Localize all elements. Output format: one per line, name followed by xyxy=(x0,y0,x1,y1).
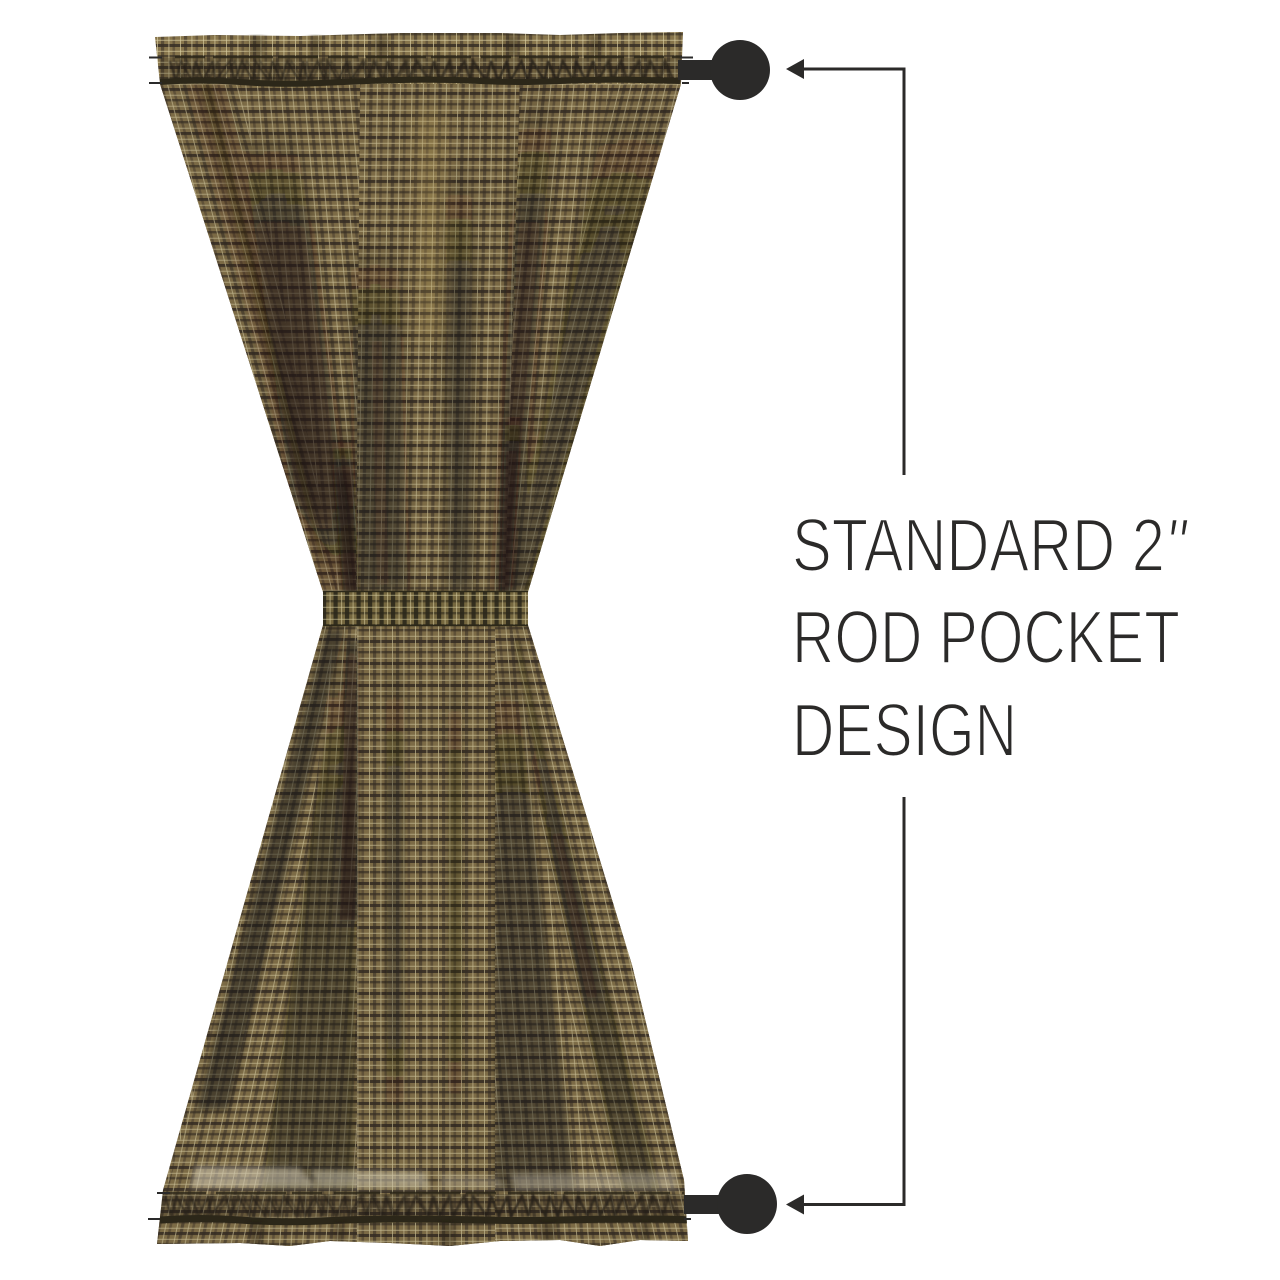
bottom ruffle folds xyxy=(250,1222,650,1246)
arrow: top bracket pointing to rod xyxy=(786,59,904,475)
upper curtain section xyxy=(150,25,690,595)
top ruffle folds xyxy=(250,36,602,56)
curtain panel xyxy=(150,25,730,1250)
curtain tie-back band xyxy=(323,591,528,626)
light worn hem band xyxy=(190,1166,678,1190)
text: rod pocket label: ROD POCKET xyxy=(792,595,1180,679)
text: rod pocket label: STANDARD 2" xyxy=(792,503,1189,587)
infographic canvas xyxy=(148,32,1188,1246)
top rod pocket gathers xyxy=(160,57,685,84)
rod pocket stitch ticks xyxy=(148,58,693,1219)
icon: bottom curtain rod finial xyxy=(684,1174,777,1234)
icon: top curtain rod finial xyxy=(678,40,770,100)
arrow: bottom bracket pointing to rod xyxy=(786,797,904,1214)
text: rod pocket label xyxy=(792,503,1189,772)
bottom rod pocket gathers xyxy=(160,1193,690,1222)
text: rod pocket label: DESIGN xyxy=(792,688,1017,772)
lower curtain section xyxy=(150,620,730,1250)
